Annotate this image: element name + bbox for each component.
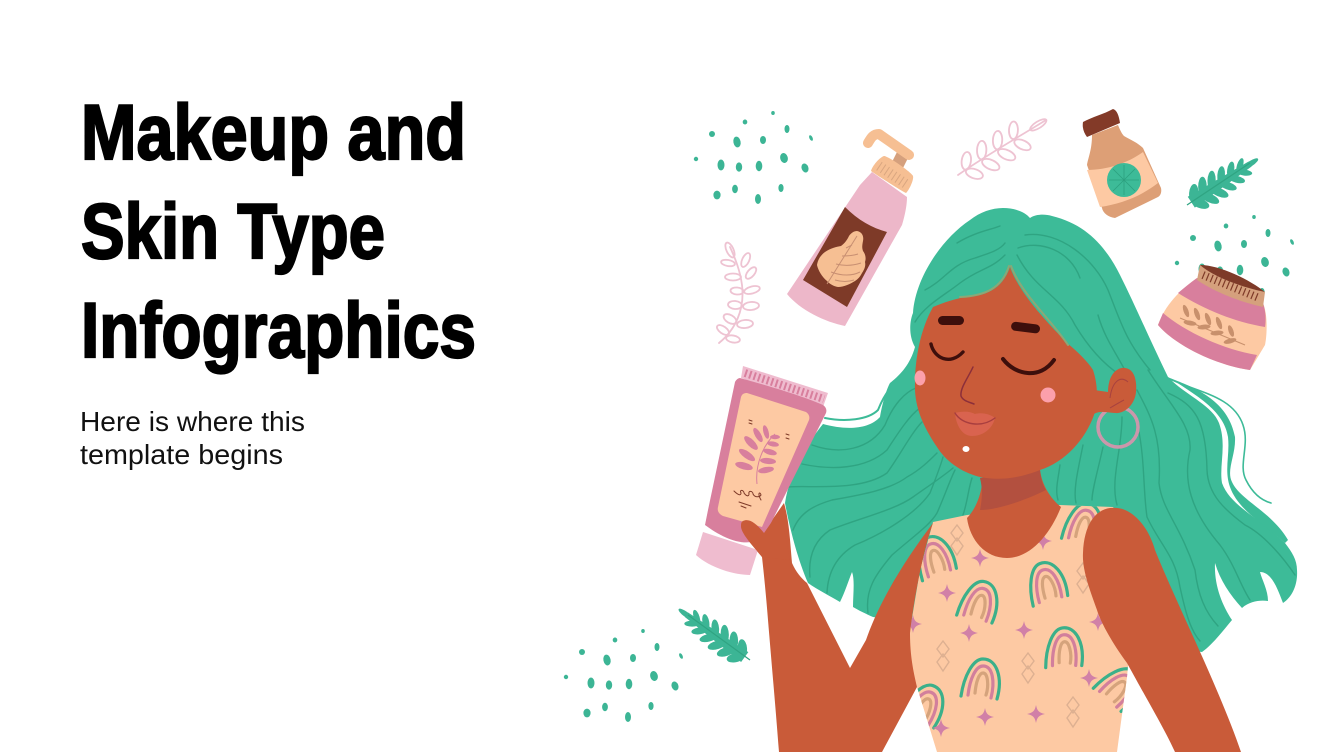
cheeks and beauty mark xyxy=(914,370,1056,452)
hair strand lines xyxy=(788,226,1295,641)
hair loose band right xyxy=(1170,378,1288,543)
hairline highlights xyxy=(960,266,1068,345)
subtitle: Here is where this xyxy=(80,406,305,437)
lips xyxy=(955,412,995,436)
tube leaf xyxy=(734,425,780,484)
tube label xyxy=(718,393,809,527)
tube cap xyxy=(696,532,758,575)
cream jar xyxy=(1158,265,1267,370)
pink sprig left xyxy=(715,241,761,344)
bottle cap xyxy=(871,156,913,193)
title: Skin Type xyxy=(81,187,385,275)
tube xyxy=(696,366,828,575)
green fern top right xyxy=(1180,144,1267,218)
dress rainbow pattern xyxy=(910,506,1128,737)
right arm xyxy=(1083,508,1241,752)
green dots top right xyxy=(1175,215,1295,308)
green dots top left xyxy=(694,111,814,204)
subtitle: template begins xyxy=(80,439,283,470)
bottle lime label xyxy=(1107,163,1141,197)
hair wedge at temple xyxy=(917,322,936,362)
hair thin strands xyxy=(825,378,1271,503)
title: Makeup and xyxy=(81,88,466,176)
tube crimp xyxy=(741,366,828,407)
pink sprig top xyxy=(948,104,1056,191)
neck shadow xyxy=(980,470,1046,510)
pump head xyxy=(868,134,909,155)
green dots bottom left xyxy=(564,629,684,722)
neck xyxy=(967,470,1061,558)
green fern bottom xyxy=(669,596,756,672)
jar leaf label xyxy=(1180,304,1245,345)
nose xyxy=(961,367,974,404)
small bottle xyxy=(1083,109,1161,218)
thumb over tube xyxy=(741,510,790,560)
ear xyxy=(1094,368,1136,414)
hair xyxy=(785,208,1297,652)
tube body xyxy=(705,378,826,542)
tube label squiggle xyxy=(734,420,789,508)
pump bottle xyxy=(787,134,913,326)
bottle neck xyxy=(891,152,908,170)
dress xyxy=(909,505,1140,752)
subtitle xyxy=(80,406,305,470)
eyebrows xyxy=(938,316,1040,334)
bottle leaf label xyxy=(817,231,866,287)
title: Infographics xyxy=(81,286,476,374)
woman illustration xyxy=(741,208,1297,752)
earring xyxy=(1098,407,1138,447)
face xyxy=(915,267,1097,479)
closed eyes xyxy=(931,344,1054,373)
title xyxy=(81,88,476,374)
left arm and hand xyxy=(741,503,933,752)
